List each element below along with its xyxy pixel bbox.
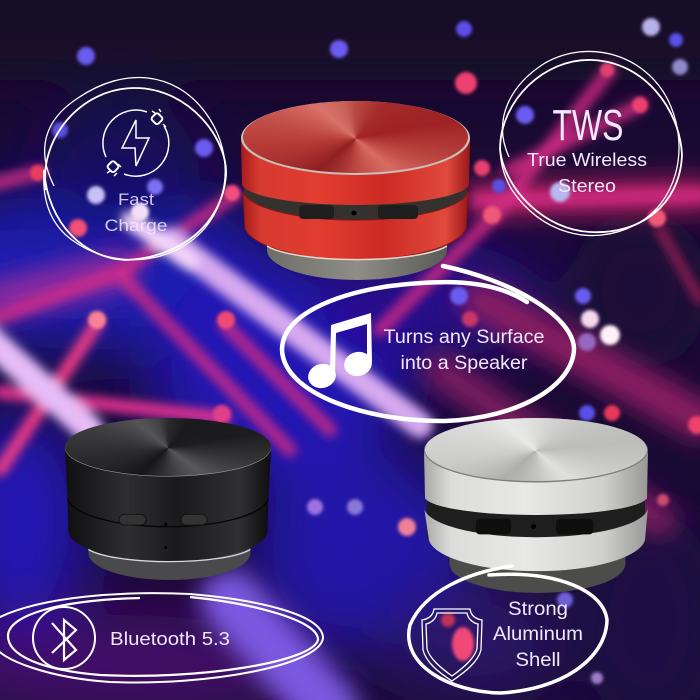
callout: TWS <box>500 51 682 236</box>
text: shell: Strong <box>508 599 568 620</box>
callout: strong aluminum shell <box>409 566 607 693</box>
text: true wireless stereo <box>527 150 647 196</box>
icon: lightning charger <box>103 109 169 176</box>
text: shell: Shell <box>516 650 560 671</box>
callout: turns any surface into a speaker <box>282 266 574 421</box>
text: bluetooth 5.3: Bluetooth 5.3 <box>110 628 230 649</box>
text: surface: into a Speaker <box>400 352 528 374</box>
icon: bluetooth <box>33 607 95 669</box>
text: shell <box>493 599 583 671</box>
icon: shield <box>422 609 482 681</box>
speaker: red <box>241 101 470 280</box>
callout: bluetooth <box>0 593 323 682</box>
speaker: black <box>64 418 272 580</box>
text: shell: Aluminum <box>493 624 583 645</box>
icon: music notes <box>305 313 375 391</box>
speaker: silver <box>424 418 648 593</box>
callout: fast charge <box>44 77 226 260</box>
text: fast charge: Fast <box>118 190 154 209</box>
text: true wireless stereo: Stereo <box>558 176 616 196</box>
text: true wireless stereo: True Wireless <box>527 150 647 170</box>
text: fast charge: Charge <box>104 216 168 235</box>
text: surface <box>384 326 544 374</box>
text: surface: Turns any Surface <box>384 326 544 348</box>
text: fast charge <box>104 190 168 235</box>
text: TWS: TWS <box>552 101 624 150</box>
